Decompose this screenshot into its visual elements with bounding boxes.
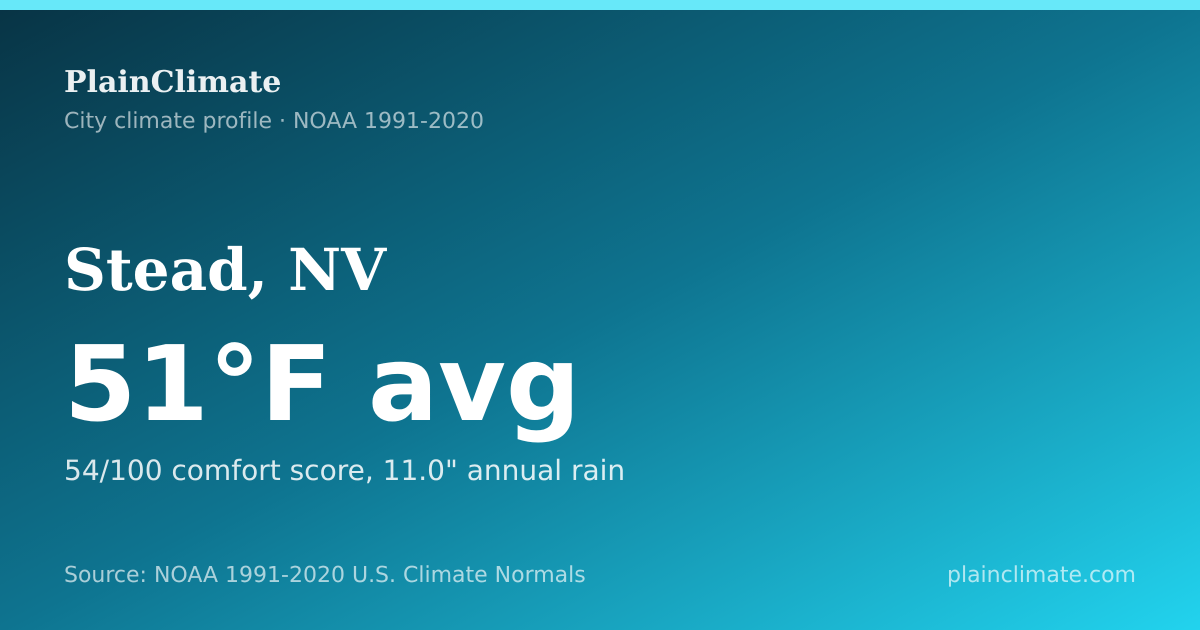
site url: plainclimate.com [947,563,1136,588]
brand name: PlainClimate [64,65,281,100]
top accent bar [0,0,1200,10]
source note: Source: NOAA 1991-2020 U.S. Climate Normals [64,563,586,588]
subtitle: City climate profile · NOAA 1991-2020 [64,109,484,134]
comfort and rain summary: 54/100 comfort score, 11.0" annual rain [64,454,625,487]
main temperature: 51°F avg [64,323,580,445]
city heading: Stead, NV [64,236,387,304]
